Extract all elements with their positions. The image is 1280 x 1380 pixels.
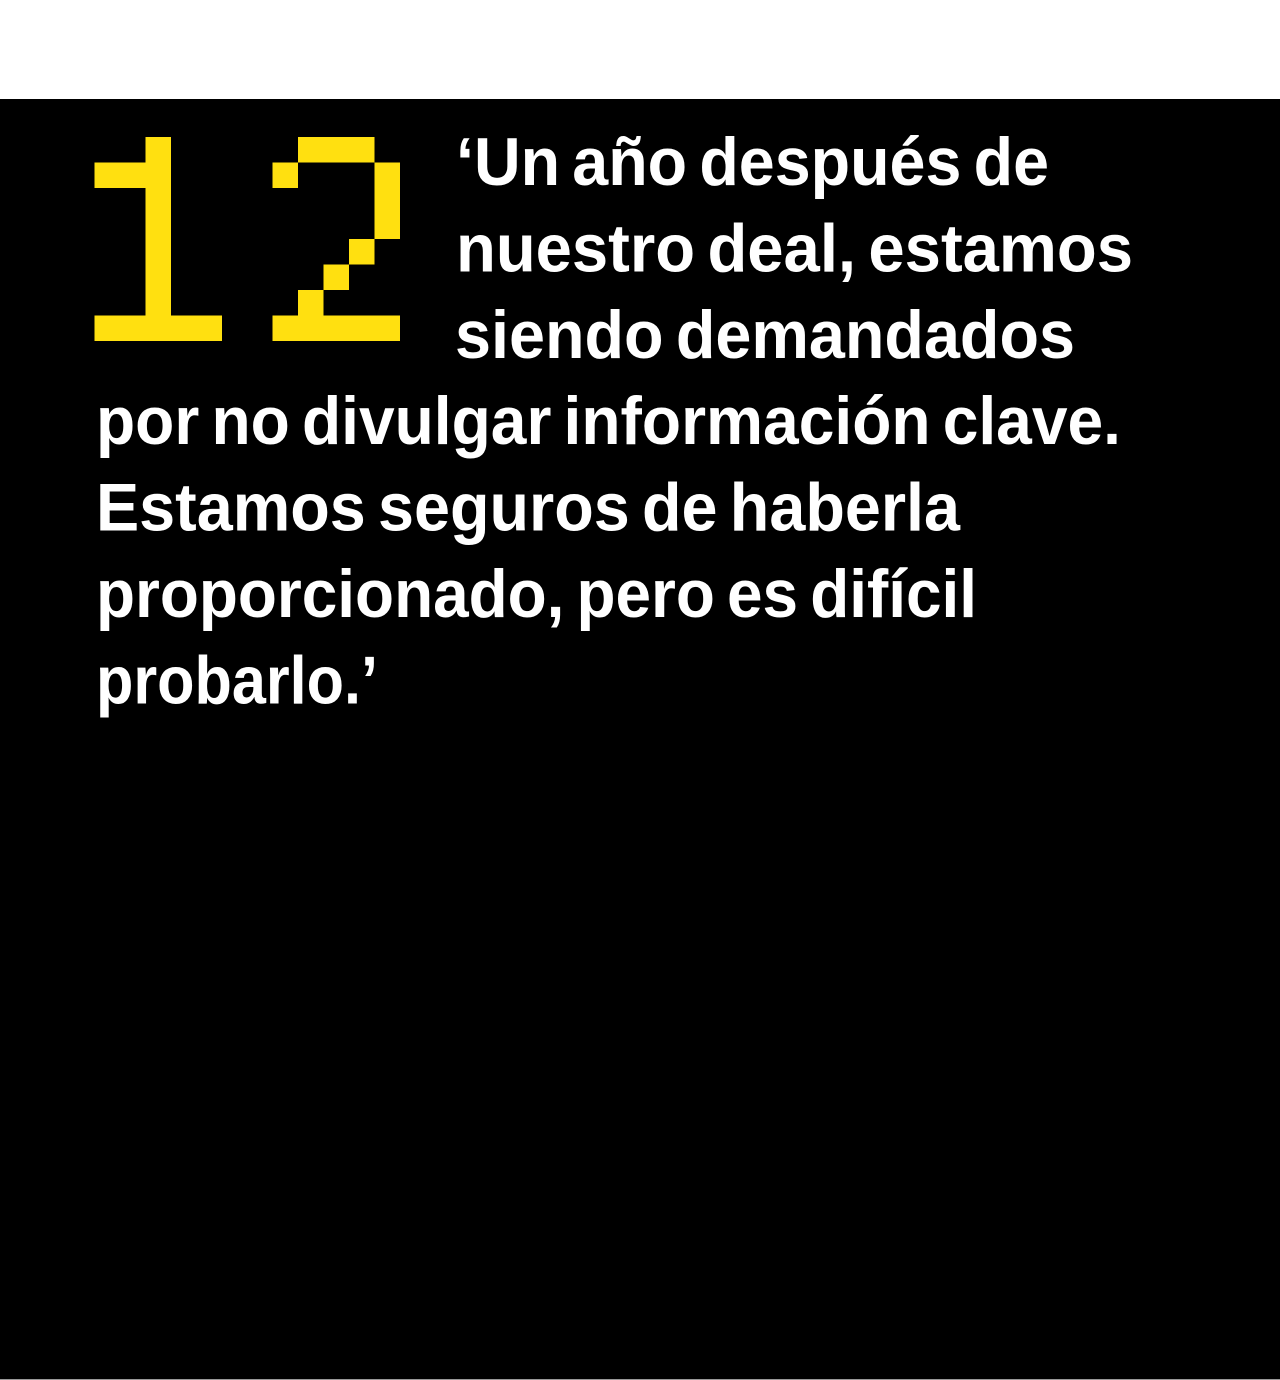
quote text: Estamos seguros de haberla [96, 470, 961, 546]
quote text: nuestro deal, estamos [456, 210, 1133, 286]
digit 2 [272, 137, 400, 341]
quote text: ‘Un año después de [456, 124, 1049, 200]
quote text: por no divulgar información clave. [96, 383, 1121, 459]
quote text: siendo demandados [455, 297, 1075, 373]
pixel number 12 [94, 137, 400, 341]
quote text [96, 124, 1133, 718]
digit 1 [94, 137, 222, 341]
quote text: proporcionado, pero es difícil [96, 556, 977, 632]
quote text: probarlo.’ [96, 642, 378, 718]
